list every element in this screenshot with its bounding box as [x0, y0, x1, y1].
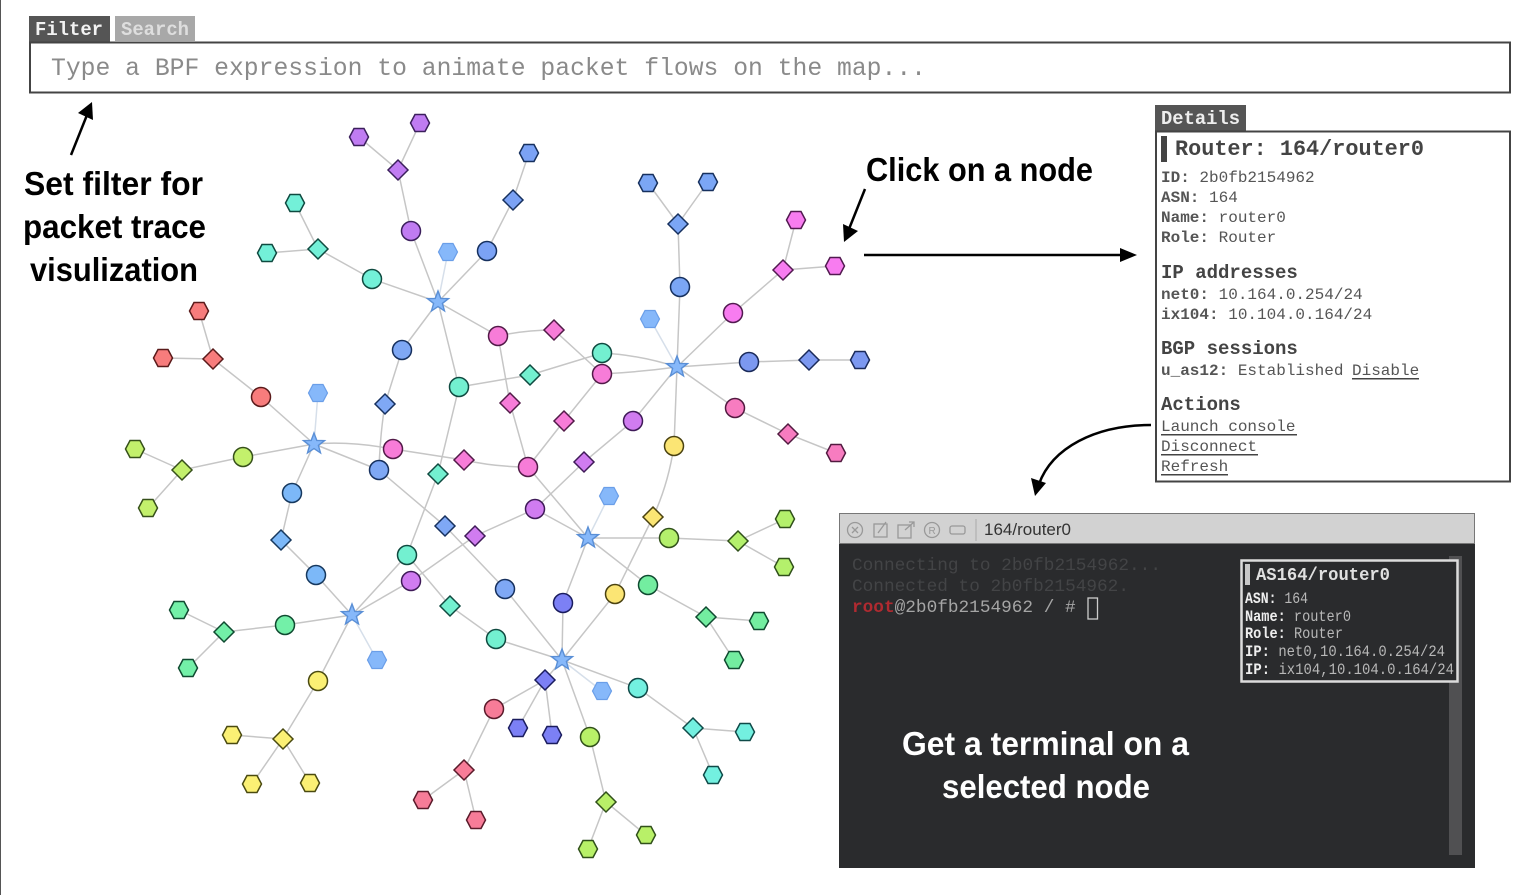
callout: set filter — [23, 165, 206, 288]
exchange stars — [304, 291, 688, 669]
IP addresses: IP addresses — [1161, 262, 1298, 284]
terminal output: root@2b0fb2154962 / # — [852, 598, 1076, 618]
panel: terminal — [839, 514, 1475, 868]
callout: set filter: packet trace — [23, 208, 206, 245]
scrollbar — [1449, 556, 1462, 855]
cluster: teal — [258, 194, 382, 288]
cluster: purple — [350, 114, 430, 240]
node info overlay: Role: Router — [1245, 625, 1343, 643]
cluster: lime left — [126, 440, 252, 516]
window icons: R — [928, 526, 936, 537]
cluster: lime bottom — [578, 728, 656, 858]
arrow: to details — [864, 248, 1137, 262]
cluster: pink middle — [384, 320, 612, 476]
actions: Disconnect — [1161, 438, 1257, 456]
cluster: magenta — [724, 212, 844, 322]
IP addresses: ix104: 10.104.0.164/24 — [1161, 306, 1372, 324]
router info: Role: Router — [1161, 229, 1276, 247]
cluster: mint left — [170, 602, 294, 676]
tab: Search: Search — [121, 19, 189, 41]
BGP sessions: BGP sessions — [1161, 338, 1298, 360]
cluster: blue upper middle — [370, 340, 514, 598]
cluster: violet middle — [402, 412, 642, 590]
BGP sessions — [1161, 338, 1419, 380]
callout: terminal — [902, 725, 1190, 805]
node info overlay: Name: router0 — [1245, 608, 1351, 626]
node info overlay: ASN: 164 — [1245, 590, 1308, 608]
details tab: Details — [1161, 108, 1240, 130]
cluster: rose pink — [726, 398, 846, 462]
cluster: coral — [414, 700, 504, 828]
router info: ID: 2b0fb2154962 — [1161, 169, 1315, 187]
tab: Filter: Filter — [35, 19, 103, 41]
arrow: to node — [843, 189, 865, 242]
filter input: Type a BPF expression to animate packet flows on the map... — [51, 56, 926, 83]
arrow: to filter bar — [71, 102, 93, 155]
node info overlay: IP: ix104,10.104.0.164/24 — [1245, 661, 1454, 679]
IP addresses: net0: 10.164.0.254/24 — [1161, 286, 1363, 304]
cluster: blue top — [478, 144, 538, 260]
window icons — [848, 522, 965, 538]
cluster: teal middle — [398, 344, 612, 648]
filter input — [30, 42, 1510, 92]
cluster: yellow middle — [606, 436, 684, 604]
node info overlay: AS164/router0 — [1256, 566, 1390, 586]
actions — [1161, 394, 1297, 476]
router info: ASN: 164 — [1161, 189, 1238, 207]
node info overlay: IP: net0,10.164.0.254/24 — [1245, 643, 1445, 661]
network map — [126, 114, 870, 858]
router info: Name: router0 — [1161, 209, 1286, 227]
BGP sessions: Disable — [1352, 362, 1419, 380]
panel: details — [1155, 105, 1510, 482]
links — [135, 123, 860, 849]
actions: Launch console — [1161, 418, 1295, 436]
filter bar — [29, 16, 1510, 92]
terminal output: Connecting to 2b0fb2154962... — [852, 556, 1161, 576]
cluster: sky blue — [271, 484, 326, 584]
cluster: indigo — [508, 594, 572, 744]
title bar: 164/router0 — [984, 520, 1071, 539]
title bar — [840, 514, 1474, 544]
callout: click on a node: Click on a node — [866, 151, 1093, 188]
light blue hosts — [308, 244, 660, 700]
router heading: Router: 164/router0 — [1175, 137, 1424, 162]
cluster: cyan — [628, 678, 754, 784]
cluster: mint right — [638, 576, 768, 668]
router info — [1161, 169, 1315, 247]
cluster: periwinkle — [740, 350, 870, 372]
node info overlay — [1242, 560, 1458, 682]
cluster: green right — [660, 510, 794, 576]
terminal output — [852, 556, 1161, 619]
cluster: blue top right — [638, 174, 718, 296]
callout: set filter: visulization — [30, 251, 198, 288]
cluster: red — [154, 302, 270, 406]
terminal body — [839, 543, 1475, 868]
callout: terminal: Get a terminal on a — [902, 725, 1190, 762]
details frame — [1156, 132, 1510, 482]
actions: Actions — [1161, 394, 1241, 416]
IP addresses — [1161, 262, 1372, 324]
arrow: to terminal — [1031, 425, 1151, 496]
cluster: yellow bottom — [222, 672, 328, 792]
actions: Refresh — [1161, 458, 1228, 476]
callout: terminal: selected node — [942, 768, 1150, 805]
callout: set filter: Set filter for — [24, 165, 203, 202]
terminal output: Connected to 2b0fb2154962. — [852, 577, 1129, 597]
BGP sessions: u_as12: Established — [1161, 362, 1343, 380]
